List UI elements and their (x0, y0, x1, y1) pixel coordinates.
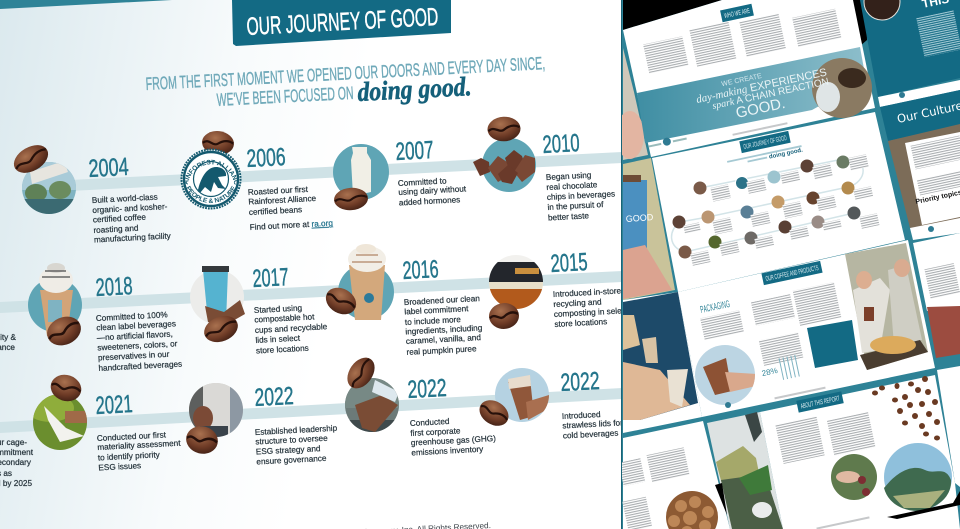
black background corners (623, 0, 867, 46)
milestone 2022 leadership: 2022 (254, 382, 294, 412)
milestone 2022 greenhouse gas: emissions inventory (411, 445, 484, 457)
photo circle: nuts (666, 491, 718, 529)
milestone 2015: store locations (554, 317, 607, 329)
body text blocks (700, 282, 841, 366)
tag: coffee and products (761, 261, 823, 285)
milestone 2006: Roasted our first (248, 185, 309, 197)
panel: top of packaging right page (913, 233, 960, 358)
milestone 2022 strawless lids: strawless lids for (562, 418, 623, 430)
banner message: day-making EXPERIENCES (695, 66, 828, 106)
milestone 2004 (9, 139, 172, 244)
subtitle: doing good. (357, 71, 472, 107)
milestone 2007: Committed to (398, 176, 447, 188)
partial text cut from previous page row 2: ity & (0, 333, 17, 342)
tag: journey of good (739, 131, 791, 153)
milestone 2015: composting in select (554, 306, 629, 319)
milestone 2018: 2018 (95, 272, 133, 302)
report spread collage (616, 0, 960, 529)
milestone 2015: Introduced in-store (553, 286, 622, 299)
icon: Rainforest Alliance seal (180, 148, 242, 210)
tag: journey of good: OUR JOURNEY OF GOOD (743, 135, 787, 151)
milestone 2016 (321, 244, 484, 357)
milestone 2007: added hormones (399, 195, 460, 207)
milestone 2016: caramel, vanilla, and (406, 333, 482, 346)
milestone 2004: organic- and kosher- (92, 202, 168, 215)
milestone 2022 leadership: Established leadership (255, 424, 338, 437)
banner message: GOOD. (734, 95, 787, 122)
milestone 2021: materiality assessment (97, 439, 181, 452)
milestone 2010: chips in beverages (547, 189, 615, 202)
mini timeline text (683, 154, 879, 266)
scattered coffee beans (872, 376, 940, 440)
milestone 2022 leadership: ensure governance (256, 454, 327, 466)
milestone 2010: better taste (548, 211, 590, 222)
mini timeline line (672, 159, 863, 252)
milestone 2017: Started using (254, 303, 303, 315)
milestone 2022 leadership (183, 382, 339, 466)
black corner by mountain photo (715, 483, 727, 515)
stat callout (762, 354, 800, 380)
panel: top right teal page (860, 0, 960, 107)
subtitle: WE'VE BEEN FOCUSED ON (216, 83, 354, 110)
milestone 2018: sweeteners, colors, or (97, 339, 178, 352)
milestone 2006: ra.org (311, 219, 334, 229)
milestone 2006 (180, 131, 334, 232)
banner message: spark A CHAIN REACTION (711, 76, 830, 112)
top-left teal band (0, 0, 172, 9)
milestone 2006: Find out more at (249, 220, 312, 232)
banner message: WE CREATE (721, 73, 763, 88)
panel: lower left page (619, 421, 730, 529)
milestone 2007: 2007 (395, 136, 434, 166)
milestone 2015: recycling and (553, 297, 602, 309)
mini timeline nodes (672, 156, 860, 258)
timeline band row 3 (0, 388, 622, 433)
text box: teal (807, 320, 858, 368)
photo circle: team (812, 58, 872, 118)
text blocks (775, 412, 875, 464)
milestone 2010: Began using (546, 171, 592, 182)
tag: about this report: ABOUT THIS REPORT (800, 395, 841, 411)
milestone 2018: clean label beverages (96, 319, 176, 332)
milestone 2017: store locations (256, 344, 309, 355)
milestone 2006: Rainforest Alliance (248, 194, 317, 206)
milestone 2022 strawless lids: Introduced (562, 410, 601, 421)
page divider line (621, 0, 622, 529)
subtitle (145, 53, 546, 110)
panel: far right page edge (937, 366, 960, 487)
milestone 2018: —no artificial flavors, (97, 330, 173, 342)
stat callout: 28% (761, 366, 779, 378)
panel: about this report (760, 375, 960, 529)
milestone 2017 (190, 263, 329, 355)
milestone 2018: handcrafted beverages (98, 360, 182, 373)
milestone 2017: 2017 (252, 263, 289, 293)
milestone 2004: 2004 (88, 153, 129, 183)
milestone 2016: Broadened our clean (404, 294, 480, 307)
milestone 2010 (473, 116, 616, 222)
milestone 2021: ESG issues (98, 461, 141, 472)
logo mark (648, 138, 687, 148)
milestone 2022 greenhouse gas: greenhouse gas (GHG) (411, 434, 496, 447)
milestone 2006: certified beans (249, 205, 302, 217)
milestone 2018: preservatives in our (98, 350, 170, 362)
photo: mountain with coffee flowers (707, 412, 783, 529)
photo: blue cup in hand (623, 158, 675, 300)
milestone 2004: manufacturing facility (94, 231, 172, 244)
panel: our culture (880, 90, 960, 240)
milestone 2022 greenhouse gas: first corporate (410, 426, 461, 438)
milestone 2021 (33, 374, 181, 471)
partial text cut from previous page row 3 (0, 438, 34, 488)
tag: who we are: WHO WE ARE (724, 8, 751, 20)
subtitle: FROM THE FIRST MOMENT WE OPENED OUR DOORS AND EVERY DAY SINCE, (145, 53, 546, 94)
milestone 2022 greenhouse gas: Conducted (410, 417, 450, 428)
milestone 2010: real chocolate (546, 180, 598, 192)
timeline band row 2 (0, 271, 622, 313)
milestone 2010: 2010 (542, 129, 580, 159)
milestone 2017: lids in select (255, 334, 301, 345)
panel: journey of good (652, 112, 905, 292)
timeline band row 1 (70, 152, 622, 191)
milestone 2017: cups and recyclable (255, 322, 328, 335)
panel: packaging (678, 240, 935, 417)
tag: coffee and products: OUR COFFEE AND PRODUCTS (765, 265, 820, 283)
milestone 2022 leadership: ESG strategy and (256, 444, 321, 456)
photo circle: iced coffee (695, 345, 756, 405)
tag: who we are (720, 4, 754, 22)
mini heading (727, 145, 803, 163)
photo circle: mountain valley (884, 443, 952, 511)
milestone 2007 (333, 136, 468, 211)
photo: lake with cups (623, 292, 702, 433)
milestone 2022 strawless lids: cold beverages (563, 429, 619, 440)
photo: blue cup in hand: GOOD (625, 212, 654, 224)
milestone 2021: Conducted our first (97, 430, 167, 443)
tag: about this report (796, 391, 844, 413)
milestone 2016: real pumpkin puree (406, 344, 477, 357)
milestone 2022 strawless lids: 2022 (560, 367, 600, 397)
left page background (0, 0, 622, 529)
milestone 2015 (489, 252, 621, 329)
milestone 2022 leadership: structure to oversee (255, 434, 328, 446)
milestone 2018: Committed to 100% (96, 310, 168, 323)
partial text cut from previous page row 2 (0, 333, 17, 352)
milestone 2004: roasting and (93, 224, 139, 235)
text columns (643, 9, 841, 74)
title banner (232, 0, 451, 46)
mini heading: doing good. (769, 147, 804, 161)
milestone 2016: label commitment (404, 304, 469, 316)
milestone 2021: to identify priority (98, 450, 161, 462)
photo circle: coffee cherries (831, 454, 877, 500)
photo: friends with cups (845, 243, 928, 370)
milestone 2018 (28, 263, 182, 373)
milestone 2022 strawless lids (475, 367, 624, 440)
black corner bottom right (887, 491, 960, 519)
icon: Rainforest Alliance seal: PEOPLE & NATURE (186, 186, 236, 204)
milestone 2004: certified coffee (93, 213, 147, 224)
milestone 2016: ingredients, including (405, 323, 483, 336)
milestone 2010: in the pursuit of (547, 200, 604, 212)
milestone 2004: Built a world-class (92, 193, 158, 205)
milestone 2021: 2021 (95, 390, 133, 420)
milestone 2017: compostable hot (254, 312, 315, 324)
milestone 2007: using dairy without (398, 184, 467, 197)
milestone 2022 greenhouse gas: 2022 (407, 374, 447, 404)
panel: who we are (623, 0, 875, 157)
heading: packaging: PACKAGING (699, 299, 731, 316)
milestone 2022 greenhouse gas (342, 352, 497, 457)
photo: hand (622, 48, 648, 160)
milestone 2006: 2006 (246, 143, 286, 173)
milestone 2016: 2016 (402, 255, 439, 285)
milestone 2016: to include more (405, 315, 461, 327)
milestone 2015: 2015 (550, 248, 588, 278)
